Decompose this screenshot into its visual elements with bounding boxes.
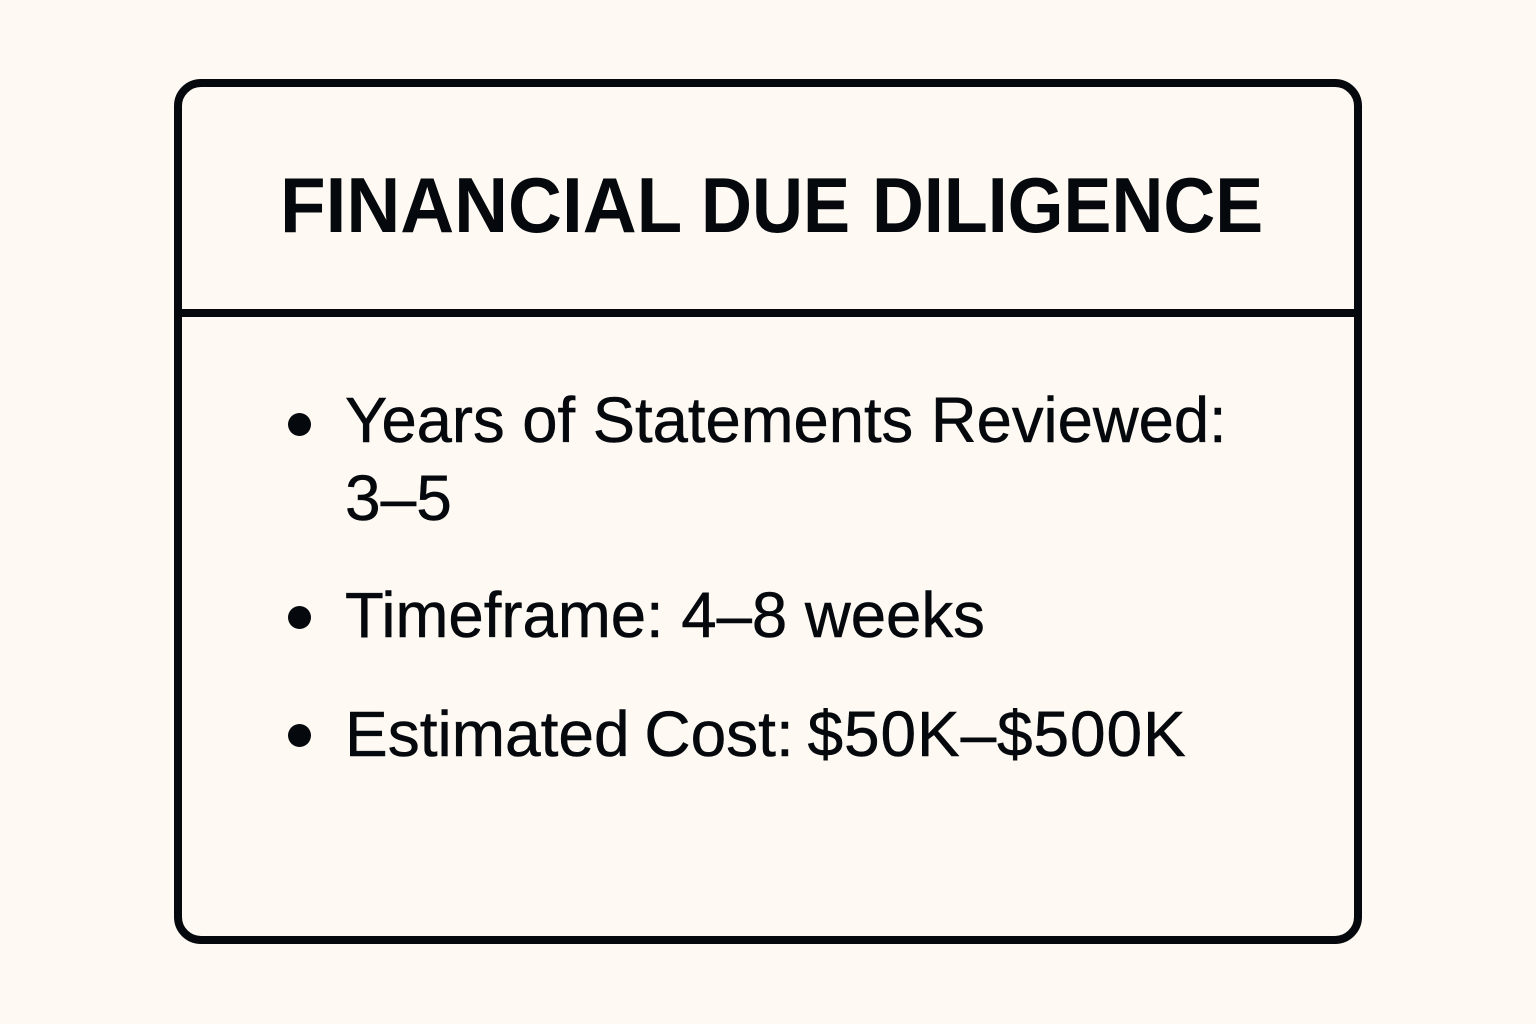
bullet icon: cost — [288, 724, 311, 746]
text: years value: 3–5 — [345, 462, 452, 534]
divider under heading — [178, 308, 1358, 316]
title: FINANCIAL — [280, 161, 682, 249]
bullet icon: years — [288, 412, 311, 436]
title: DUE — [701, 161, 850, 249]
panel: financial due diligence card — [174, 79, 1362, 944]
text: estimated cost: Estimated Cost: $50K–$500K — [345, 698, 1187, 770]
title — [280, 161, 1263, 249]
text: timeframe: Timeframe: 4–8 weeks — [345, 579, 985, 651]
text: years of statements reviewed: Years of Statements Reviewed: — [345, 384, 1227, 456]
bullet icon: timeframe — [288, 606, 311, 629]
title: DILIGENCE — [872, 161, 1263, 249]
